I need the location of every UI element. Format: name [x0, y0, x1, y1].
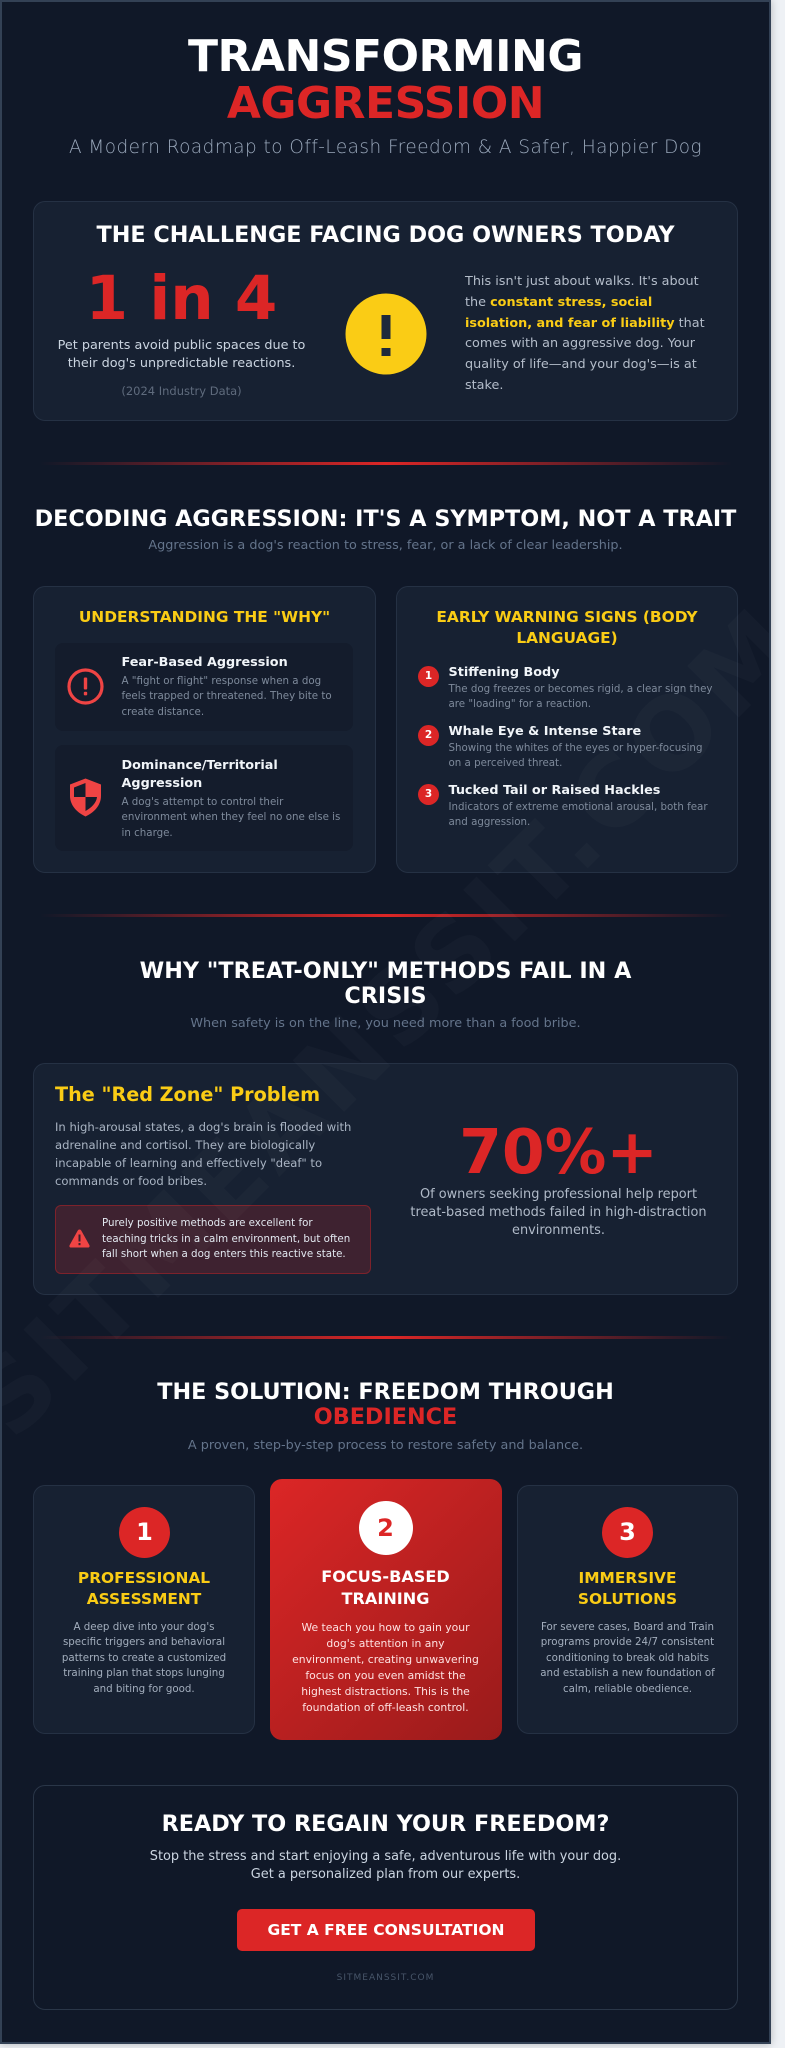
- heading: why: UNDERSTANDING THE "WHY": [79, 608, 330, 626]
- cta text: Stop the stress and start enjoying a safe, adventurous life with your dog.: [150, 1849, 621, 1864]
- step 1 number: 1: [136, 1518, 153, 1546]
- sign 2 text: Showing the whites of the eyes or hyper-focusing: [448, 742, 702, 754]
- panel: challenge: [33, 201, 738, 421]
- red zone text: adrenaline and cortisol. They are biologically: [55, 1138, 315, 1152]
- sign 3: [418, 783, 708, 828]
- stat caption: [410, 1187, 707, 1238]
- fear-based title: Fear-Based Aggression: [122, 655, 288, 670]
- step 3 text: and establish a new foundation of: [540, 1667, 715, 1679]
- step 1 text: training plan that stops lunging: [63, 1667, 225, 1679]
- sign 2: [418, 724, 702, 769]
- stat caption: [58, 338, 305, 371]
- step 3 text: [540, 1621, 715, 1695]
- heading: solution: THE SOLUTION: FREEDOM THROUGH: [157, 1379, 614, 1405]
- fear-based text: create distance.: [122, 706, 204, 718]
- sign 1: [418, 665, 712, 710]
- step 3 title: IMMERSIVE: [579, 1569, 676, 1587]
- step 2 text: environment, creating unwavering: [292, 1653, 479, 1666]
- icon: shield: [70, 778, 101, 816]
- step 1 title: PROFESSIONAL: [78, 1569, 210, 1587]
- step 1 text: patterns to create a customized: [62, 1652, 226, 1664]
- red zone text: In high-arousal states, a dog's brain is flooded with: [55, 1120, 351, 1134]
- sign 2 title: Whale Eye & Intense Stare: [448, 724, 641, 739]
- stat caption: Pet parents avoid public spaces due to: [58, 338, 305, 353]
- step 2 title: FOCUS-BASED: [321, 1567, 450, 1586]
- step 1 text: and biting for good.: [93, 1683, 195, 1695]
- sign 1 title: Stiffening Body: [448, 665, 560, 680]
- subheading: treat-only: When safety is on the line, you need more than a food bribe.: [190, 1016, 581, 1031]
- dominance text: environment when they feel no one else is: [122, 811, 340, 823]
- stat: 1 in 4: 1 in 4: [86, 263, 277, 334]
- dominance title: [122, 758, 278, 791]
- title: TRANSFORMING: [188, 31, 583, 82]
- challenge text: stake.: [465, 378, 503, 393]
- red zone text: commands or food bribes.: [55, 1174, 207, 1188]
- step 2 text: foundation of off-leash control.: [302, 1701, 469, 1714]
- challenge text: isolation, and fear of liability that: [465, 316, 705, 331]
- dominance text: A dog's attempt to control their: [122, 796, 283, 808]
- fear-based text: feels trapped or threatened. They bite to: [122, 690, 332, 702]
- source note: (2024 Industry Data): [121, 384, 242, 398]
- step 3 text: programs provide 24/7 consistent: [541, 1636, 714, 1648]
- icon: warning triangle: [69, 1230, 90, 1248]
- heading: warning signs: [436, 608, 698, 646]
- step 2 title: TRAINING: [342, 1588, 429, 1608]
- callout text: fall short when a dog enters this reactive state.: [102, 1248, 346, 1260]
- challenge text: [464, 274, 705, 393]
- icon: alert circle: [67, 668, 104, 705]
- title: AGGRESSION: [227, 78, 544, 128]
- sign 3 text: [448, 801, 708, 828]
- step 1 title: [78, 1569, 210, 1608]
- sign 2 text: [448, 742, 702, 769]
- dominance text: in charge.: [122, 827, 173, 839]
- panel: call to action: [33, 1785, 738, 2010]
- heading: warning signs: EARLY WARNING SIGNS (BODY: [436, 608, 698, 626]
- stat caption: their dog's unpredictable reactions.: [68, 356, 295, 371]
- step 1 title: ASSESSMENT: [87, 1590, 201, 1608]
- challenge text: quality of life—and your dog's—is at: [465, 357, 697, 372]
- fear-based text: [122, 675, 332, 718]
- badge 3: 3: [425, 788, 432, 800]
- panel: step 1: [33, 1485, 255, 1734]
- challenge text: This isn't just about walks. It's about: [465, 274, 699, 289]
- icon: warning circle: [346, 294, 426, 374]
- sign 1 text: The dog freezes or becomes rigid, a clear sign they: [448, 683, 712, 695]
- step 1 text: specific triggers and behavioral: [63, 1636, 225, 1648]
- sign 1 text: [448, 683, 712, 710]
- step 2 text: dog's attention in any: [326, 1637, 445, 1650]
- heading: warning signs: LANGUAGE): [516, 628, 618, 646]
- panel: red zone: [33, 1063, 738, 1295]
- stat: 70%+: 70%+: [459, 1116, 658, 1188]
- heading: red zone: The "Red Zone" Problem: [55, 1083, 320, 1106]
- heading: challenge: THE CHALLENGE FACING DOG OWNERS TODAY: [97, 222, 674, 248]
- step 3 title: SOLUTIONS: [578, 1590, 677, 1608]
- step 3 text: calm, reliable obedience.: [563, 1683, 692, 1695]
- callout text: Purely positive methods are excellent for: [102, 1217, 313, 1229]
- heading: decoding: DECODING AGGRESSION: IT'S A SYMPTOM, NOT A TRAIT: [35, 506, 736, 532]
- cta text: [150, 1849, 621, 1882]
- step 1 text: A deep dive into your dog's: [74, 1621, 214, 1633]
- cta button: [237, 1909, 535, 1951]
- panel: warning signs: [396, 586, 738, 873]
- subheading: decoding: Aggression is a dog's reaction to stress, fear, or a lack of clear leadership.: [148, 538, 623, 553]
- cta button: GET A FREE CONSULTATION: [267, 1921, 504, 1939]
- red zone text: incapable of learning and effectively "deaf" to: [55, 1156, 322, 1170]
- callout: [55, 1205, 371, 1274]
- step 2 text: We teach you how to gain your: [301, 1621, 470, 1634]
- step 2 title: [321, 1567, 450, 1608]
- challenge text: the constant stress, social: [465, 295, 652, 310]
- step 3 number: [602, 1507, 653, 1558]
- step 2 text: highest distractions. This is the: [301, 1685, 470, 1698]
- panel: step 2: [270, 1479, 502, 1740]
- cta text: Get a personalized plan from our experts.: [251, 1867, 520, 1882]
- subtitle: A Modern Roadmap to Off-Leash Freedom & A Safer, Happier Dog: [69, 137, 702, 158]
- sign 2 text: on a perceived threat.: [448, 757, 562, 769]
- badge 2: 2: [425, 729, 432, 741]
- stat caption: environments.: [512, 1223, 605, 1238]
- callout text: teaching tricks in a calm environment, but often: [102, 1232, 350, 1244]
- heading: solution: [157, 1379, 614, 1430]
- step 3 title: [578, 1569, 677, 1608]
- step 2 text: [292, 1621, 479, 1714]
- footer url: SITMEANSSIT.COM: [337, 1973, 434, 1983]
- subheading: solution: A proven, step-by-step process to restore safety and balance.: [188, 1438, 583, 1453]
- step 3 text: For severe cases, Board and Train: [541, 1621, 714, 1633]
- panel: why: [33, 586, 376, 873]
- callout text: [102, 1217, 350, 1260]
- dominance text: [122, 796, 340, 839]
- step 2 text: focus on you even amidst the: [305, 1669, 466, 1682]
- heading: treat-only: WHY "TREAT-ONLY" METHODS FAIL IN A: [140, 958, 631, 984]
- sign 3 text: Indicators of extreme emotional arousal, both fear: [448, 801, 708, 813]
- item: fear-based: [55, 643, 353, 731]
- panel: step 3: [517, 1485, 738, 1734]
- step 2 number: 2: [377, 1514, 394, 1542]
- sign 3 text: and aggression.: [448, 816, 530, 828]
- heading: treat-only: CRISIS: [344, 983, 427, 1009]
- dominance title: Dominance/Territorial: [122, 758, 278, 773]
- step 1 number: [119, 1507, 170, 1558]
- fear-based text: A "fight or flight" response when a dog: [122, 675, 321, 687]
- item: dominance: [55, 745, 353, 851]
- badge 3: [418, 784, 439, 805]
- stat caption: Of owners seeking professional help report: [420, 1187, 697, 1202]
- step 1 text: [62, 1621, 226, 1695]
- red zone text: [55, 1120, 351, 1188]
- challenge text: comes with an aggressive dog. Your: [465, 336, 695, 351]
- cta heading: READY TO REGAIN YOUR FREEDOM?: [162, 1811, 609, 1837]
- badge 1: 1: [425, 670, 432, 682]
- step 2 number: [358, 1501, 412, 1555]
- sign 1 text: are "loading" for a reaction.: [448, 698, 591, 710]
- stat caption: treat-based methods failed in high-distraction: [410, 1205, 707, 1220]
- heading: treat-only: [140, 958, 632, 1009]
- title: [188, 31, 583, 128]
- step 3 number: 3: [619, 1518, 636, 1546]
- sign 3 title: Tucked Tail or Raised Hackles: [448, 783, 660, 798]
- heading: solution: OBEDIENCE: [314, 1404, 457, 1430]
- badge 2: [418, 725, 439, 746]
- dominance title: Aggression: [122, 776, 202, 791]
- badge 1: [418, 666, 439, 687]
- step 3 text: conditioning to break old habits: [546, 1652, 709, 1664]
